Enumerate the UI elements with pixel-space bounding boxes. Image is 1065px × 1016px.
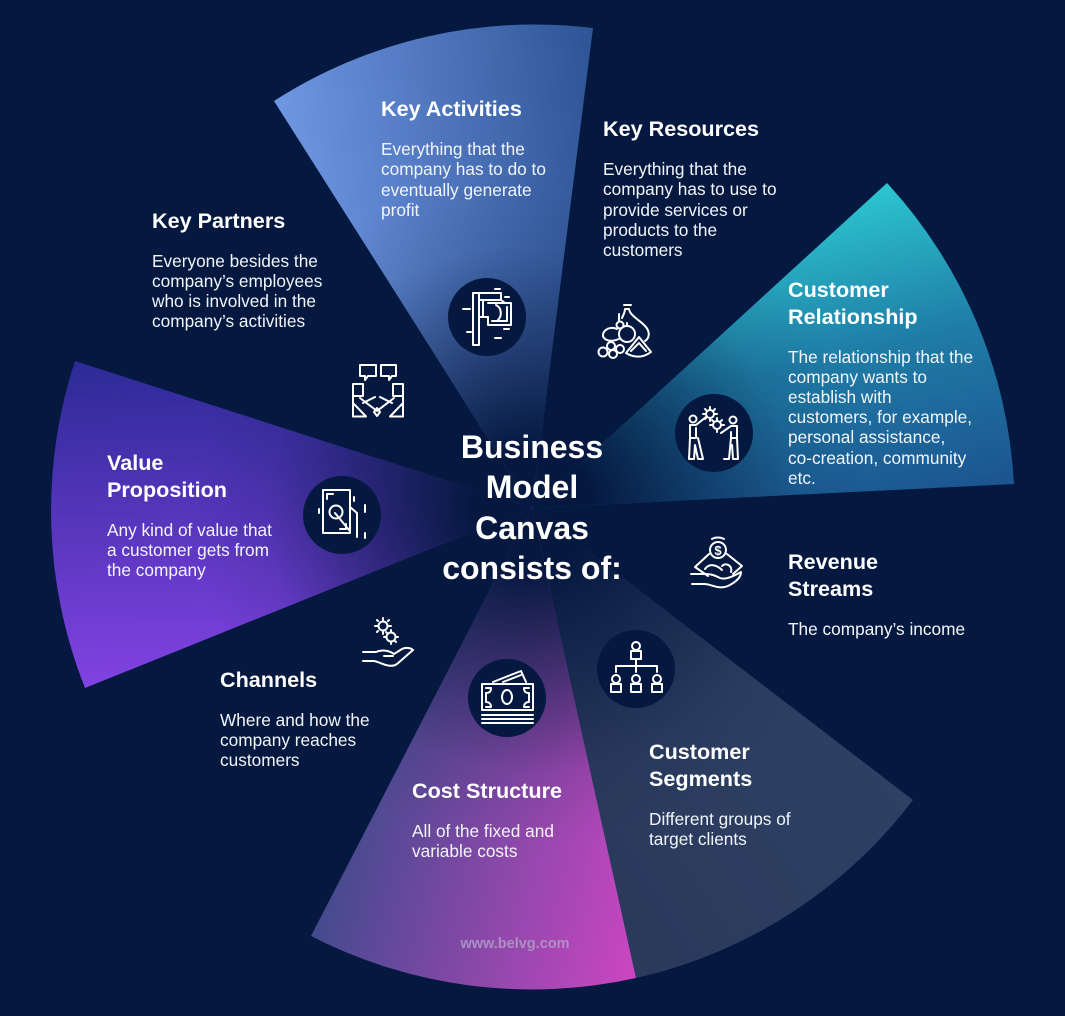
text: Value Proposition description: a customer gets from bbox=[107, 540, 269, 560]
text: Value Proposition description: Any kind of value that bbox=[107, 520, 272, 540]
icon: hand holding banknote bbox=[303, 476, 381, 554]
text: Key Resources description: Everything that the bbox=[603, 159, 747, 179]
title: Business bbox=[461, 429, 603, 465]
icon: fruit bbox=[598, 305, 651, 358]
heading: Key Activities: Key Activities bbox=[381, 96, 522, 121]
icon: hand with gears bbox=[363, 618, 413, 666]
panel: Value Proposition bbox=[51, 361, 532, 688]
panel: Key Resources bbox=[598, 116, 777, 358]
text: Key Partners description: company’s activities bbox=[152, 311, 305, 331]
text: Key Resources description: provide services or bbox=[603, 200, 748, 220]
text: Customer Relationship description: company wants to bbox=[788, 367, 927, 387]
text: Key Activities description: eventually generate bbox=[381, 180, 532, 200]
title: consists of: bbox=[442, 550, 622, 586]
text: Key Resources description: customers bbox=[603, 240, 683, 260]
text: Key Activities description: company has to do to bbox=[381, 159, 546, 179]
watermark: www.belvg.com bbox=[459, 936, 570, 952]
heading: Key Resources: Key Resources bbox=[603, 116, 759, 141]
wedge: Key Activities bbox=[274, 24, 593, 508]
text: Key Activities description: profit bbox=[381, 200, 420, 220]
panel: Channels bbox=[220, 618, 413, 770]
icon: organisation chart bbox=[597, 630, 675, 708]
panel: Revenue Streams bbox=[691, 538, 965, 639]
title: Model bbox=[486, 469, 578, 505]
icon: hand with money: $ bbox=[714, 543, 722, 558]
heading: Value Proposition: Value bbox=[107, 450, 163, 475]
text: Channels description: Where and how the bbox=[220, 710, 370, 730]
text: Key Activities description: Everything that the bbox=[381, 139, 525, 159]
text: Channels description: customers bbox=[220, 750, 300, 770]
text: Customer Segments description: Different groups of bbox=[649, 809, 791, 829]
icon: partners shaking hands bbox=[353, 365, 403, 416]
heading: Cost Structure: Cost Structure bbox=[412, 778, 562, 803]
text: Key Partners description: who is involved in the bbox=[151, 291, 316, 311]
text: Customer Relationship description: customers, for example, bbox=[788, 407, 972, 427]
panel: Key Activities bbox=[274, 24, 593, 508]
text: Channels description: company reaches bbox=[220, 730, 356, 750]
heading: Revenue Streams: Streams bbox=[788, 576, 873, 601]
text: Customer Relationship description: etc. bbox=[788, 468, 816, 488]
text: Key Partners description: company’s employees bbox=[152, 271, 322, 291]
panel: Key Partners bbox=[151, 208, 403, 416]
text: Revenue Streams description: The company’s income bbox=[788, 619, 965, 639]
icon: stack of banknotes bbox=[468, 659, 546, 737]
heading: Customer Relationship: Customer bbox=[788, 277, 889, 302]
wedge: Cost Structure bbox=[311, 508, 636, 989]
text: Customer Relationship description: co-creation, community bbox=[788, 448, 967, 468]
text: Customer Segments description: target clients bbox=[649, 829, 747, 849]
panel: Customer Segments bbox=[532, 508, 913, 978]
text: Cost Structure description: variable costs bbox=[412, 841, 517, 861]
text: Key Partners description: Everyone besides the bbox=[152, 251, 318, 271]
title: Canvas bbox=[475, 510, 589, 546]
wedge: Customer Relationship bbox=[532, 183, 1014, 508]
icon: flag with banknotes bbox=[448, 278, 526, 356]
panel: Cost Structure bbox=[311, 508, 636, 989]
text: Key Resources description: company has to use to bbox=[603, 179, 777, 199]
icon: hand with money bbox=[691, 538, 742, 587]
text: Cost Structure description: All of the fixed and bbox=[412, 821, 554, 841]
heading: Channels: Channels bbox=[220, 667, 317, 692]
text: Customer Relationship description: The relationship that the bbox=[788, 347, 973, 367]
heading: Revenue Streams: Revenue bbox=[788, 549, 878, 574]
text: Customer Relationship description: personal assistance, bbox=[788, 427, 945, 447]
wedge: Value Proposition bbox=[51, 361, 532, 688]
heading: Customer Segments: Segments bbox=[649, 766, 752, 791]
heading: Value Proposition: Proposition bbox=[107, 477, 227, 502]
text: Customer Relationship description: establish with bbox=[788, 387, 892, 407]
wedge: Customer Segments bbox=[532, 508, 913, 978]
heading: Key Partners: Key Partners bbox=[152, 208, 285, 233]
text: Value Proposition description: the company bbox=[107, 560, 206, 580]
panel: Customer Relationship bbox=[532, 183, 1014, 508]
icon: two people with gears bbox=[675, 394, 753, 472]
heading: Customer Segments: Customer bbox=[649, 739, 750, 764]
text: Key Resources description: products to the bbox=[603, 220, 717, 240]
heading: Customer Relationship: Relationship bbox=[788, 304, 918, 329]
